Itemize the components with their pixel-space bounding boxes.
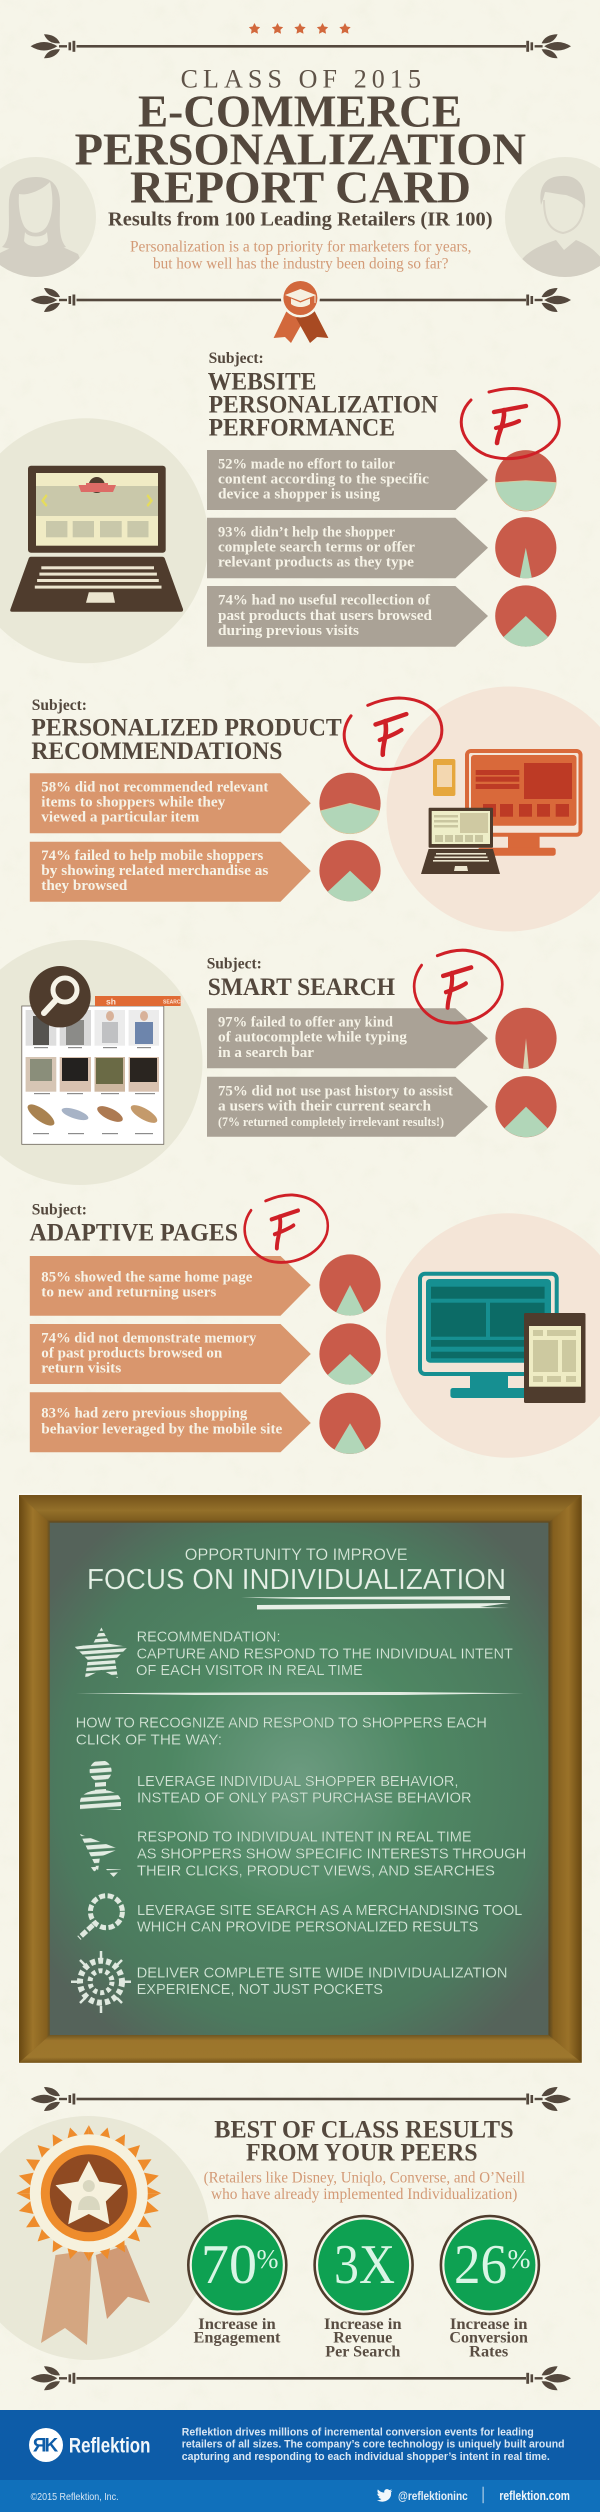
logo: Reflektion [69,2434,150,2457]
pie: 52% [495,450,556,511]
pie: 58% [319,773,381,834]
arrow: 75% [207,1077,488,1137]
grade F [340,692,447,775]
wood frame [18,1494,582,2064]
heading: website personalization: WEBSITE [208,368,316,395]
heading: website personalization: Subject: [209,350,264,367]
pie: 74% [495,585,556,647]
title: PERSONALIZATION [75,124,526,174]
logo [29,2428,150,2462]
product results page: sh [106,996,116,1006]
arrow: 83%: behavior leveraged by the mobile site [41,1421,283,1437]
product results page [22,996,185,1144]
company description [182,2427,565,2463]
heading: adaptive pages: ADAPTIVE PAGES [30,1220,238,1247]
product results page: SEARCH [163,1000,185,1006]
arrow: 74% mobile: 74% failed to help mobile shoppers [41,848,263,864]
stat: 3X: Per Search [325,2344,401,2361]
stat: 3X: Increase in [324,2316,402,2333]
panel: product recommendations [30,686,600,932]
heading: adaptive pages: Subject: [32,1201,87,1218]
arrow: 52% [207,450,488,510]
how to text: HOW TO RECOGNIZE AND RESPOND TO SHOPPERS EACH [76,1715,487,1732]
website: reflektion.com [499,2488,570,2503]
copyright: ©2015 Reflektion, Inc. [31,2491,119,2503]
heading: smart search: SMART SEARCH [208,974,396,1001]
icon: devices [421,751,580,874]
logo: K [44,2436,58,2456]
subtitle: Results from 100 Leading Retailers (IR 100) [108,209,492,231]
grade F [412,947,504,1026]
heading: best of class [214,2117,514,2167]
heading: smart search: Subject: [207,955,262,972]
divider [31,2366,571,2390]
pie: 83% [319,1393,381,1454]
arrow: 93% [207,518,488,578]
arrow: 85%: to new and returning users [41,1285,216,1301]
panel: best of class [0,2116,539,2361]
five stars [249,23,351,34]
arrow: 97%: in a search bar [218,1045,314,1061]
icon: graduation medal [274,278,328,343]
icon: rosette [16,2125,161,2345]
pie: 93% [495,517,556,578]
tip: respond to intent: THEIR CLICKS, PRODUCT VIEWS, AND SEARCHES [137,1862,495,1879]
icon: man avatar [505,157,600,280]
stat: 70%: % [256,2244,278,2274]
stat: 70%: Increase in [198,2316,276,2333]
recommendation text: RECOMMENDATION: [137,1629,280,1646]
tip: respond to intent [137,1829,526,1879]
recommendation text [136,1629,513,1679]
how to text [76,1715,487,1748]
arrow: 74% memory: return visits [41,1361,121,1377]
arrow: 74%: during previous visits [218,623,359,639]
divider [31,2087,571,2111]
tip: shopper behavior: INSTEAD OF ONLY PAST PURCHASE BEHAVIOR [137,1790,472,1807]
arrow: 85%: 85% showed the same home page [41,1270,253,1286]
arrow: 52%: device a shopper is using [218,486,381,502]
recommendation text: CAPTURE AND RESPOND TO THE INDIVIDUAL INTENT [137,1645,513,1662]
icon: woman avatar [0,157,96,280]
board heading [87,1545,510,1610]
title [75,65,526,212]
heading: website personalization: PERSONALIZATION [209,391,438,418]
arrow: 83%: 83% had zero previous shopping [41,1406,248,1422]
board heading: FOCUS ON INDIVIDUALIZATION [87,1564,506,1596]
title: CLASS OF 2015 [181,65,421,94]
intro text: but how well has the industry been doing so far? [153,255,448,272]
stat: 26%: Conversion [449,2330,528,2347]
tip: respond to intent: AS SHOPPERS SHOW SPECIFIC INTERESTS THROUGH [137,1845,526,1862]
arrow: 97%: 97% failed to offer any kind [218,1015,394,1031]
arrow: 74% memory: 74% did not demonstrate memory [41,1331,257,1347]
intro text [130,239,472,272]
icon: chalk magnifier [79,1896,122,1938]
icon: chalk shopper [80,1760,121,1810]
heading: adaptive pages [30,1201,238,1247]
title: E-COMMERCE [138,87,462,137]
heading: product recommendations: RECOMMENDATIONS [31,738,282,765]
arrow: 74% memory: of past products browsed on [41,1346,223,1362]
pie: 85% [319,1254,381,1316]
arrow: 74% mobile [30,842,311,902]
tip: shopper behavior [137,1773,472,1807]
arrow: 58%: viewed a particular item [41,810,200,826]
pie: 97% [495,1008,557,1069]
retailers note: (Retailers like Disney, Uniqlo, Converse, and O’Neill [204,2169,526,2186]
tip: site search [137,1902,522,1936]
arrow: 83% [30,1392,311,1452]
panel: adaptive pages [30,1191,600,1458]
tip: site search: WHICH CAN PROVIDE PERSONALIZED RESULTS [137,1919,478,1936]
arrow: 97% [207,1008,488,1068]
tip: shopper behavior: LEVERAGE INDIVIDUAL SHOPPER BEHAVIOR, [137,1773,458,1790]
grade F [461,388,559,459]
heading: product recommendations: Subject: [32,697,87,714]
heading: best of class: FROM YOUR PEERS [246,2140,478,2167]
footer [0,2410,600,2512]
stat: 70%: 70 [201,2234,257,2296]
arrow: 74%: past products that users browsed [218,608,433,624]
divider with medal [31,288,571,312]
stat: 26% [441,2216,539,2361]
how to text: CLICK OF THE WAY: [76,1731,222,1748]
stat: 3X [315,2216,413,2361]
heading: website personalization: PERFORMANCE [209,415,395,442]
icon: pale circle [386,686,600,932]
pie: 75% [495,1076,557,1137]
stat: 70% [188,2216,286,2347]
grade F [242,1191,331,1267]
tip: site wide: DELIVER COMPLETE SITE WIDE INDIVIDUALIZATION [137,1964,508,1981]
heading: website personalization [208,350,438,442]
title: REPORT CARD [130,162,471,212]
arrow: 52%: 52% made no effort to tailor [218,456,395,472]
company description: retailers of all sizes. The company’s core technology is uniquely built around [182,2439,565,2451]
arrow: 75%: 75% did not use past history to assist [218,1084,453,1100]
stat: 26%: % [508,2244,530,2274]
arrow: 74% memory [30,1324,311,1384]
tip: site wide: EXPERIENCE, NOT JUST POCKETS [137,1981,383,1998]
stat: 3X: Revenue [333,2330,392,2347]
panel: smart search [0,940,557,1185]
recommendation text: OF EACH VISITOR IN REAL TIME [136,1662,363,1679]
logo: R [32,2436,46,2456]
icon: chalk cursor [80,1834,121,1877]
pale circle [0,2116,210,2360]
tip: site wide [137,1964,508,1998]
arrow: 75%: (7% returned completely irrelevant results!) [218,1115,444,1129]
icon: pale circle [386,1213,600,1458]
arrow: 74%: 74% had no useful recollection of [218,592,431,608]
top divider [31,34,571,58]
intro text: Personalization is a top priority for marketers for years, [130,239,472,256]
arrow: 58% [30,773,311,833]
tip: respond to intent: RESPOND TO INDIVIDUAL INTENT IN REAL TIME [137,1829,472,1846]
arrow: 74% mobile: they browsed [41,878,128,894]
stat: 70%: Engagement [194,2330,281,2347]
arrow: 93%: 93% didn’t help the shopper [218,525,395,541]
stat: 3X: 3X [334,2234,395,2296]
heading: best of class: BEST OF CLASS RESULTS [214,2117,514,2144]
panel: chalkboard [18,1494,582,2064]
icon: monitor and tablet [420,1274,586,1403]
arrow: 52%: content according to the specific [218,471,429,487]
icon: twitter bird [377,2489,392,2502]
heading: product recommendations: PERSONALIZED PRODUCT [31,715,342,742]
arrow: 85% [30,1256,311,1316]
tip: site search: LEVERAGE SITE SEARCH AS A MERCHANDISING TOOL [137,1902,522,1919]
arrow: 93%: complete search terms or offer [218,540,415,556]
twitter handle: @reflektioninc [398,2489,468,2503]
icon: laptop circle [0,418,208,663]
icon: chalk star [75,1628,128,1678]
stat: 26%: Increase in [450,2316,528,2333]
stat: 26%: Rates [469,2344,508,2361]
board surface [50,1523,548,2035]
heading: product recommendations [31,697,342,765]
arrow: 58%: items to shoppers while they [41,795,226,811]
pie: 74% memory [319,1323,381,1385]
company description: capturing and responding to each individual shopper’s intent in real time. [182,2451,550,2463]
arrow: 75%: a users with their current search [218,1099,432,1115]
stat: 26%: 26 [454,2234,507,2296]
heading: smart search [207,955,396,1001]
icon: laptop [10,466,183,612]
arrow: 74% mobile: by showing related merchandise as [41,863,268,879]
company description: Reflektion drives millions of incremental conversion events for leading [182,2427,534,2439]
icon: magnifier [29,966,91,1027]
icon: chalk globe [71,1951,131,2013]
icon: pale circle [0,940,202,1185]
retailers note [204,2169,526,2203]
arrow: 93%: relevant products as they type [218,555,414,571]
arrow: 74% [207,586,488,647]
panel: website personalization [0,350,559,663]
pie: 74% mobile [319,840,381,901]
retailers note: who have already implemented Individualization) [211,2186,517,2203]
arrow: 97%: of autocomplete while typing [218,1030,408,1046]
board heading: OPPORTUNITY TO IMPROVE [185,1545,408,1564]
arrow: 58%: 58% did not recommended relevant [41,780,268,796]
